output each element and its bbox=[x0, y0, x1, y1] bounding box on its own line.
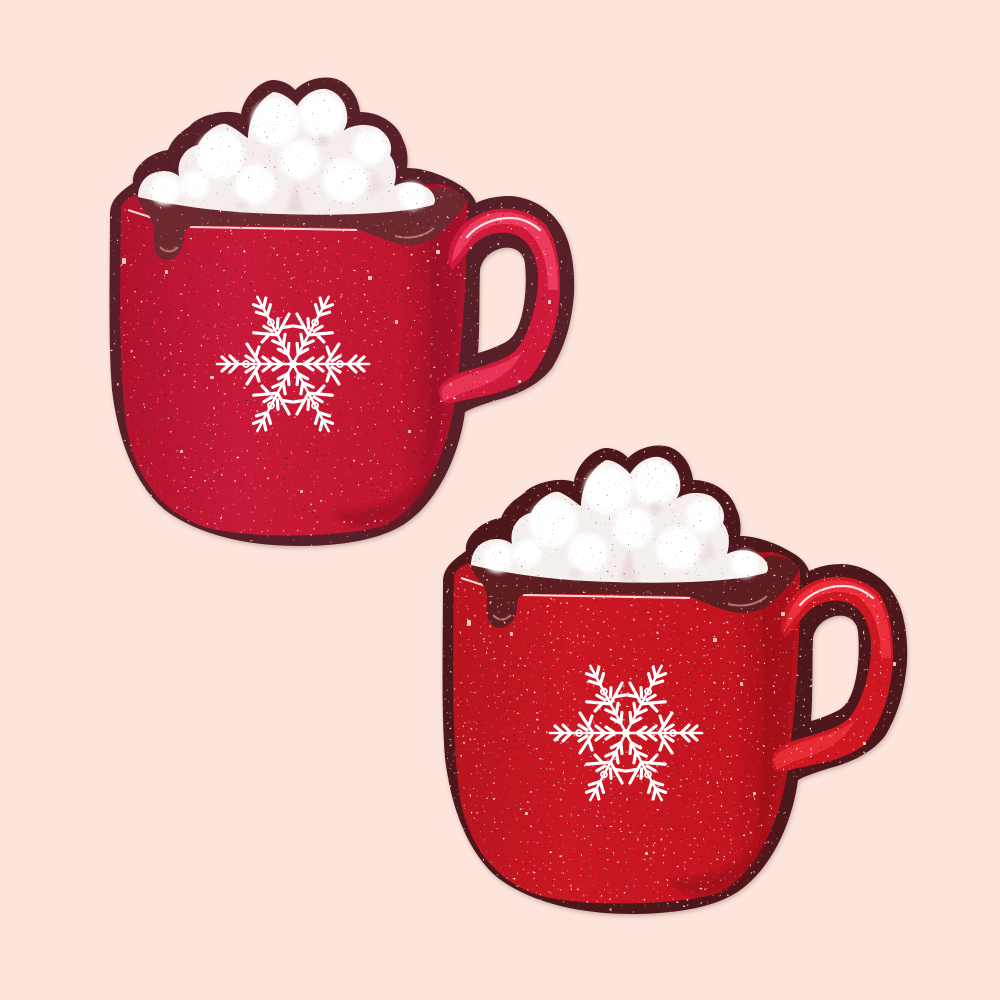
mug 1 white speckles bbox=[100, 70, 590, 560]
mug 2 sticker shadow bbox=[444, 448, 908, 916]
mug 1 sticker shadow bbox=[110, 80, 575, 548]
mug 1 dark speckles bbox=[100, 70, 590, 560]
mug 2 bbox=[433, 438, 923, 928]
mug 2 dark speckles bbox=[442, 455, 892, 907]
mug 2 chocolate rim with drip bbox=[470, 556, 799, 628]
mug 1 red body bbox=[120, 184, 467, 535]
mug 1 handle bbox=[439, 209, 560, 403]
mug 2 handle bbox=[772, 577, 893, 771]
mug 2 red body bbox=[453, 552, 800, 903]
mug 1 marshmallows bbox=[135, 85, 440, 217]
mug 1 bbox=[100, 70, 590, 560]
mug 2 white speckles bbox=[433, 438, 923, 928]
mug 1 chocolate rim with drip bbox=[137, 188, 466, 260]
mug 2 marshmallows bbox=[468, 453, 773, 585]
mug 2 snowflake icon bbox=[550, 657, 702, 809]
mug 1 dark maroon outline bbox=[110, 78, 574, 546]
illustration: two hot cocoa mugs bbox=[108, 77, 910, 918]
mug 1 snowflake icon bbox=[217, 288, 369, 440]
mug 2 dark maroon outline bbox=[442, 446, 907, 914]
